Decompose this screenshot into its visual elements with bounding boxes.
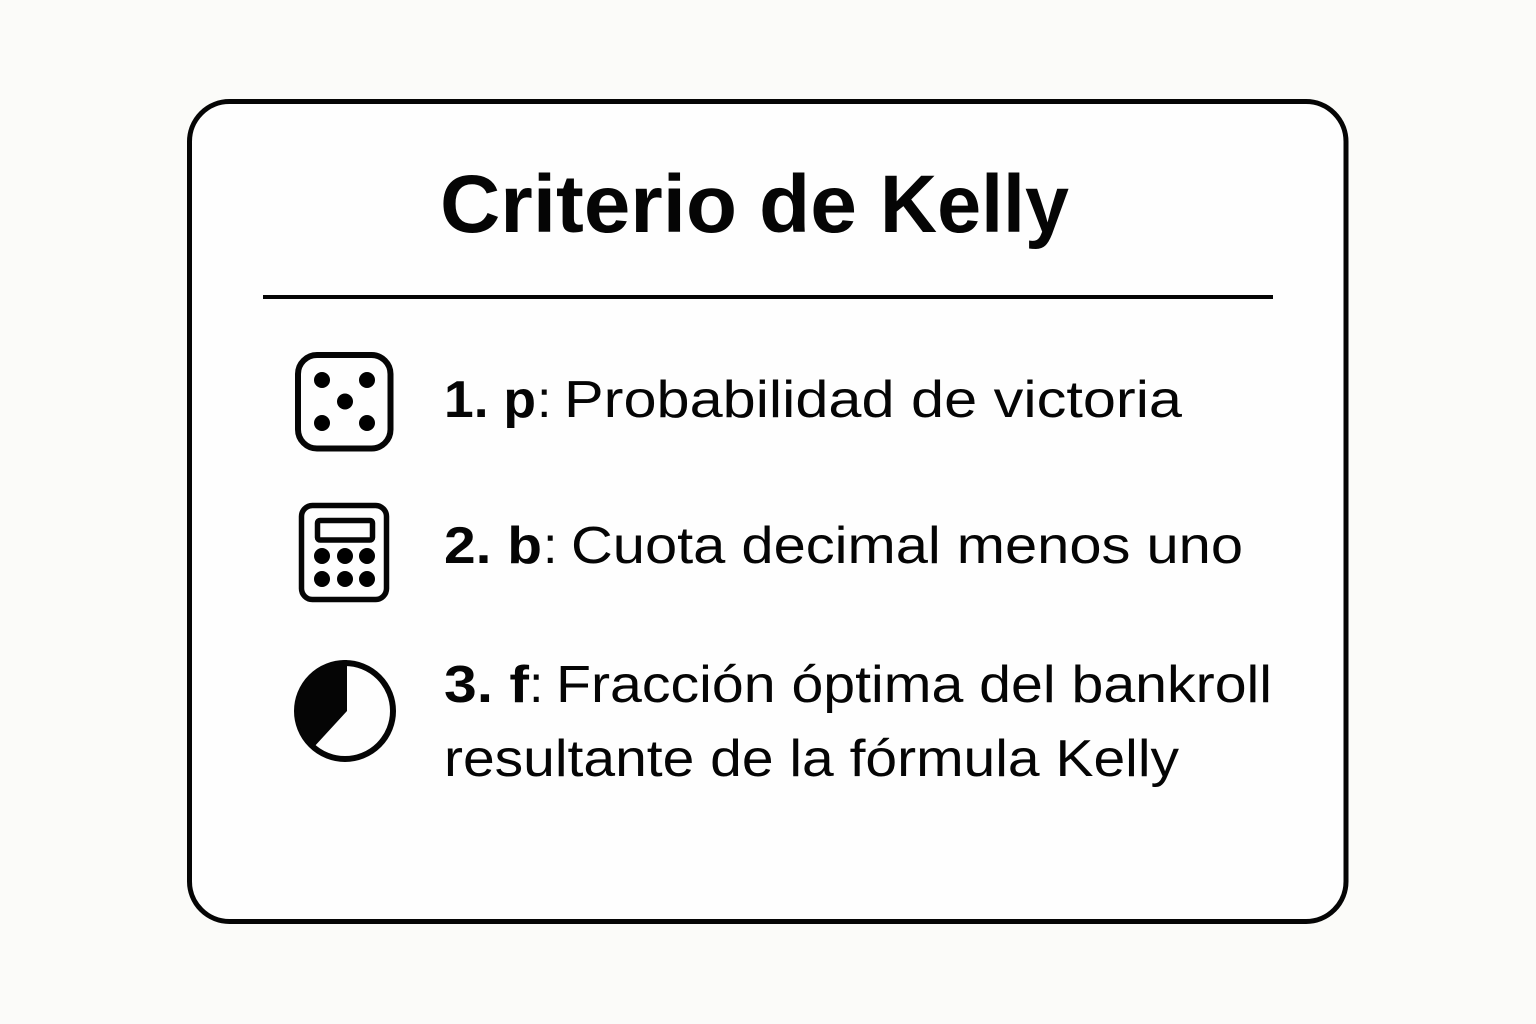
- text: item 2: 2. b: [444, 517, 542, 575]
- icon: die: [298, 355, 390, 448]
- text: item 3: [444, 656, 1272, 788]
- text: item 1: Probabilidad de victoria: [564, 371, 1182, 429]
- text: item 3: :: [529, 656, 543, 714]
- icon: pie chart: [297, 660, 393, 759]
- icon: calculator: [302, 506, 386, 600]
- title: de: [759, 159, 857, 250]
- text: item 2: Cuota decimal menos uno: [571, 517, 1243, 575]
- panel: card: [190, 102, 1346, 922]
- text: item 1: :: [537, 371, 551, 429]
- text: item 3: resultante de la fórmula Kelly: [444, 730, 1179, 788]
- text: item 2: :: [543, 517, 557, 575]
- title: Criterio: [440, 159, 737, 250]
- text: item 3: 3. f: [444, 656, 530, 714]
- text: item 3: Fracción óptima del bankroll: [556, 656, 1272, 714]
- title: [440, 159, 1069, 250]
- title: Kelly: [880, 159, 1069, 250]
- text: item 1: 1. p: [444, 371, 536, 429]
